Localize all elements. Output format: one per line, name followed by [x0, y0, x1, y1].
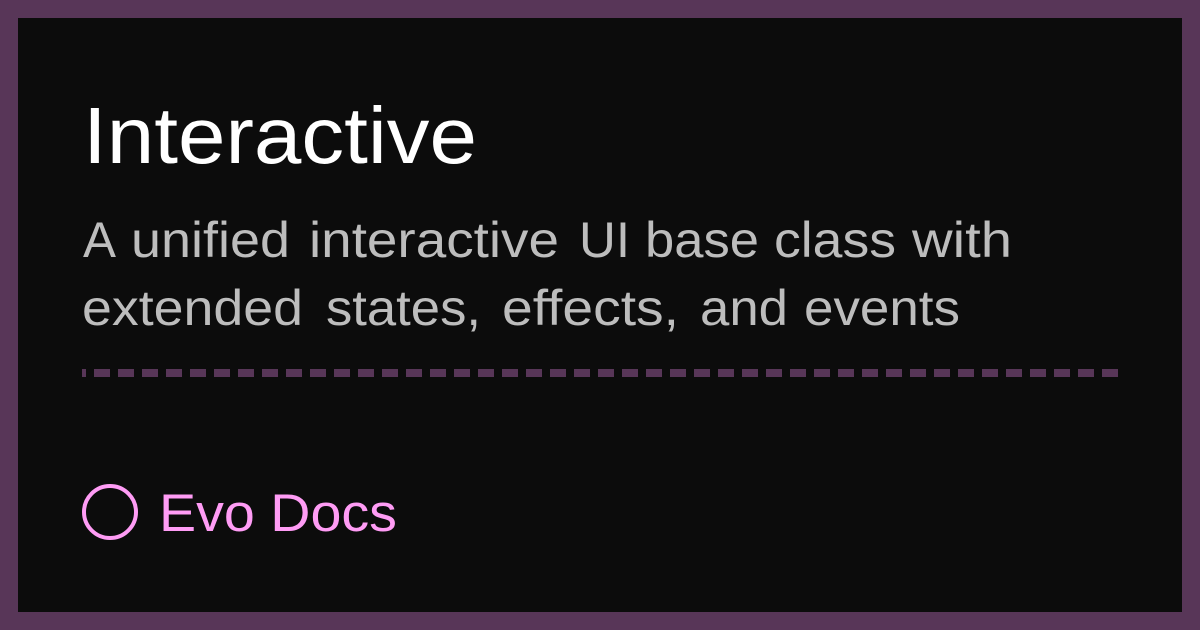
description text: and	[700, 280, 788, 336]
description text: UI	[579, 212, 630, 268]
description text: unified	[131, 212, 290, 268]
description text: base	[645, 212, 759, 268]
description text: A	[83, 212, 117, 268]
description text: with	[911, 212, 1012, 268]
icon: circle logo	[84, 486, 136, 538]
brand name: Evo Docs	[159, 484, 397, 543]
description text: class	[774, 212, 896, 268]
description text: events	[804, 280, 960, 336]
description text: extended	[82, 280, 303, 336]
description text	[82, 212, 1012, 336]
description text: states,	[326, 280, 481, 336]
description text: interactive	[309, 212, 559, 268]
dashed divider	[82, 369, 1118, 377]
description text: effects,	[502, 280, 679, 336]
title: Interactive	[83, 91, 477, 180]
